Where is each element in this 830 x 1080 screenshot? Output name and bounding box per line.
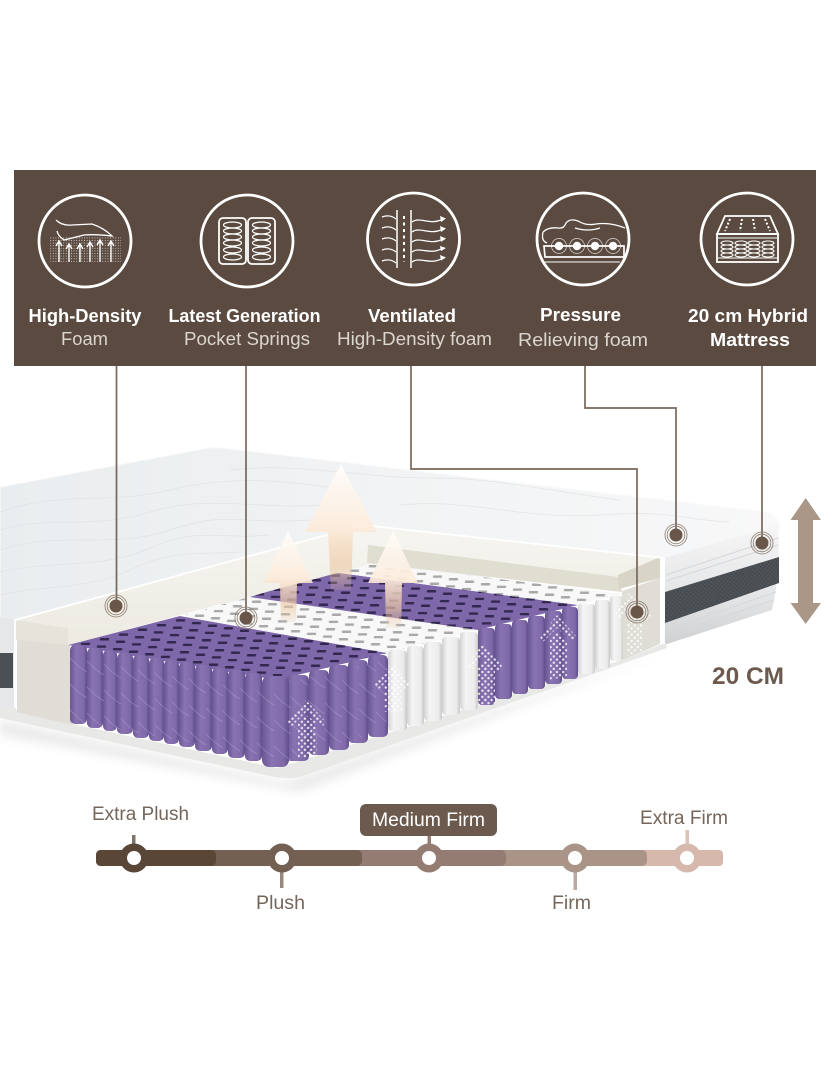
dotted airflow arrow 2	[374, 663, 410, 712]
floor shadow	[0, 650, 670, 792]
foam right thickness	[618, 557, 660, 589]
stem: plush	[280, 868, 284, 888]
icon: high-density foam	[39, 195, 131, 287]
label: firm: Firm	[552, 893, 591, 914]
node: extra plush	[120, 844, 148, 872]
feature panel	[14, 170, 816, 366]
icon: pressure relieving foam	[537, 193, 629, 285]
label: high-density foam	[28, 305, 142, 349]
left side panel	[0, 617, 16, 710]
leader lines	[116, 366, 762, 617]
label: pressure relieving foam: Relieving foam	[518, 329, 648, 350]
spring tops: purple front band	[68, 616, 387, 680]
mattress top surface	[0, 448, 780, 625]
label: plush: Plush	[256, 893, 305, 914]
label: pocket springs	[168, 305, 320, 349]
node: extra firm	[672, 844, 702, 872]
marker: high-density foam	[105, 595, 127, 617]
dotted airflow arrow 5	[615, 592, 652, 656]
right side panel	[664, 525, 779, 645]
heat arrow left	[263, 531, 313, 622]
foam inner rear wall	[367, 543, 622, 592]
stem: extra firm	[686, 830, 689, 846]
icon: pocket springs	[201, 195, 293, 287]
label: pressure relieving foam	[518, 304, 648, 350]
heat arrow right	[368, 531, 418, 628]
marker: pocket springs	[235, 607, 257, 629]
label: hybrid mattress: Mattress	[710, 329, 790, 350]
label: pocket springs: Latest Generation	[168, 305, 320, 326]
side ribbing	[666, 538, 778, 636]
label: pressure relieving foam: Pressure	[540, 304, 621, 325]
label: ventilated foam: Ventilated	[368, 305, 456, 326]
heat arrow large	[305, 464, 377, 590]
icon: hybrid mattress	[701, 193, 793, 285]
height arrow	[790, 498, 821, 624]
purple pocket spring columns, rear group	[478, 607, 578, 705]
foam cut left face	[17, 638, 72, 725]
pocket seams	[70, 650, 387, 765]
dotted airflow arrow 3	[466, 643, 502, 706]
dotted airflow arrow 4	[540, 615, 577, 680]
node: firm	[560, 844, 590, 872]
foam left thickness	[15, 620, 68, 645]
foam white outline	[15, 525, 664, 708]
label: high-density foam: Foam	[61, 328, 108, 349]
icon: ventilated foam	[368, 193, 460, 285]
stem: firm	[574, 868, 577, 890]
foam layer top	[15, 525, 660, 645]
height label: 20 CM	[712, 663, 784, 690]
stem: medium firm	[428, 835, 431, 847]
label: ventilated foam	[337, 305, 492, 349]
dark mesh band right	[665, 557, 779, 623]
node: plush	[268, 844, 296, 872]
node: medium firm	[414, 844, 444, 872]
label: hybrid mattress: 20 cm Hybrid	[688, 305, 808, 326]
scale bar	[96, 850, 723, 866]
white pocket spring columns	[388, 632, 478, 731]
mattress cutaway illustration	[0, 448, 780, 792]
purple pocket spring columns, side face	[262, 655, 388, 767]
panel background	[14, 170, 816, 366]
purple pocket spring columns, front face	[70, 645, 262, 761]
label: high-density foam: High-Density	[28, 305, 142, 326]
label: pocket springs: Pocket Springs	[184, 328, 310, 349]
label: extra firm: Extra Firm	[640, 808, 728, 829]
spring tops: white rear band	[332, 563, 622, 605]
foam block right face	[622, 578, 660, 660]
marker: pressure relieving foam	[665, 524, 687, 546]
firmness scale	[92, 804, 728, 914]
dark mesh band left	[0, 653, 13, 688]
spring tops: white band	[180, 597, 478, 653]
stem: extra plush	[132, 835, 136, 847]
quilted wave lines	[0, 468, 730, 595]
selected firmness pill: Medium Firm	[372, 810, 485, 831]
label: ventilated foam: High-Density foam	[337, 328, 492, 349]
spring tops: purple rear band	[250, 572, 578, 630]
mattress base strip	[0, 643, 667, 778]
selected firmness pill	[360, 804, 497, 836]
label: extra plush: Extra Plush	[92, 804, 189, 825]
marker: ventilated foam	[626, 601, 648, 623]
white pocket spring columns, rear group	[578, 596, 623, 674]
label: hybrid mattress	[688, 305, 808, 350]
dotted airflow arrow 1	[287, 700, 326, 758]
marker: hybrid mattress	[751, 532, 773, 554]
